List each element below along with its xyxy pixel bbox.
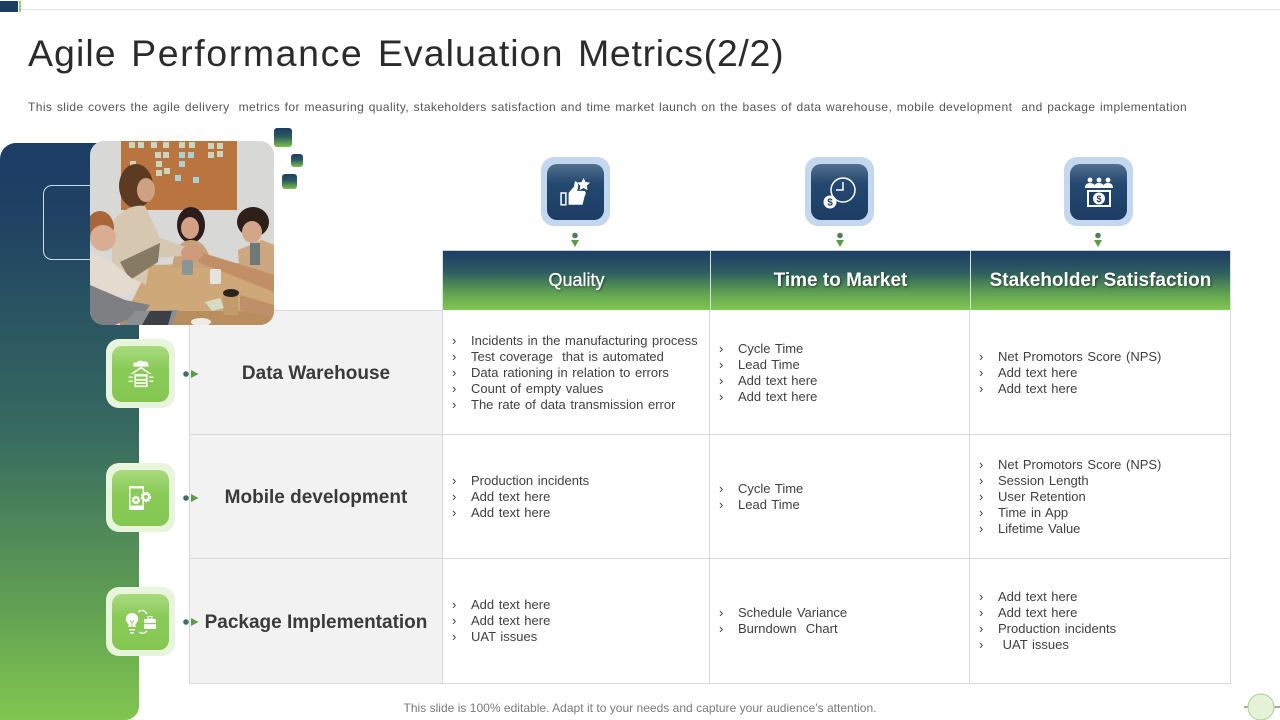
footer note: This slide is 100% editable. Adapt it to your needs and capture your audience's attention. (403, 701, 877, 715)
text: package stakeholder satisfaction: UAT issues (1003, 637, 1069, 652)
laptop (123, 310, 178, 325)
text: package quality: Add text here (471, 597, 550, 612)
text: package stakeholder satisfaction (980, 589, 1116, 652)
table body cells (443, 310, 1231, 684)
page marker circle (1244, 694, 1280, 720)
icon: time to market clock (805, 157, 874, 226)
arrow: time to market (836, 232, 844, 247)
icon: stakeholder satisfaction: $ (1096, 194, 1102, 204)
table (120, 262, 274, 325)
text: package time to market (720, 605, 847, 636)
column header Stakeholder Satisfaction: Stakeholder Satisfaction (990, 270, 1211, 291)
text: data warehouse stakeholder satisfaction (980, 349, 1161, 396)
arrow: stakeholder satisfaction (1094, 232, 1102, 247)
text: mobile stakeholder satisfaction: Net Promotors Score (NPS) (998, 457, 1161, 472)
arrow: mobile development (183, 494, 198, 502)
text: mobile stakeholder satisfaction: Session Length (998, 473, 1089, 488)
text: package stakeholder satisfaction: Add text here (998, 589, 1077, 604)
text: data warehouse time to market (720, 341, 817, 404)
column header Stakeholder Satisfaction (970, 250, 1231, 311)
text: data warehouse stakeholder satisfaction: Net Promotors Score (NPS) (998, 349, 1161, 364)
table: row header Mobile development (189, 434, 443, 559)
text: mobile stakeholder satisfaction: Lifetime Value (998, 521, 1080, 536)
text: data warehouse time to market: Add text here (738, 373, 817, 388)
text: mobile stakeholder satisfaction: User Retention (998, 489, 1086, 504)
center woman (177, 207, 205, 243)
icon: time to market clock: $ (827, 198, 833, 208)
column header Quality (442, 250, 710, 311)
icon: stakeholder satisfaction (1064, 157, 1133, 226)
text: mobile time to market: Cycle Time (738, 481, 803, 496)
table: row header Data Warehouse (189, 310, 443, 435)
arrow: package implementation (183, 618, 198, 626)
text: data warehouse time to market: Lead Time (738, 357, 800, 372)
outlined rounded frame (43, 185, 113, 260)
text: mobile stakeholder satisfaction: Time in App (998, 505, 1068, 520)
text: package quality (452, 597, 550, 644)
text: data warehouse quality: Data rationing in relation to errors (471, 365, 669, 380)
arrow: data warehouse (183, 370, 198, 378)
text: data warehouse quality: The rate of data transmission error (471, 397, 675, 412)
text: data warehouse quality: Test coverage that is automated (471, 349, 664, 364)
right man (237, 207, 269, 237)
text: package quality: UAT issues (471, 629, 537, 644)
subtitle: This slide covers the agile delivery metrics for measuring quality, stakeholders satisfaction and time market launch on the bases of data warehouse, mobile development and package implementation (28, 100, 1187, 114)
text: package stakeholder satisfaction: Production incidents (998, 621, 1116, 636)
text: data warehouse time to market: Add text here (738, 389, 817, 404)
column header Time to Market (710, 250, 970, 311)
standing woman (119, 164, 153, 208)
text: mobile time to market (720, 481, 803, 512)
text: package quality: Add text here (471, 613, 550, 628)
text: data warehouse stakeholder satisfaction: Add text here (998, 381, 1077, 396)
table: row header Package Implementation: Package Implementation (205, 612, 427, 632)
text: data warehouse stakeholder satisfaction: Add text here (998, 365, 1077, 380)
decorative squares (274, 128, 303, 189)
table: row header Data Warehouse: Data Warehouse (242, 363, 390, 384)
icon: package implementation (106, 587, 175, 656)
arrow: quality (571, 232, 579, 247)
text: mobile quality: Add text here (471, 505, 550, 520)
icon: quality thumbs up (541, 157, 610, 226)
icon: data warehouse (106, 339, 175, 408)
text: mobile quality (452, 473, 589, 520)
text: mobile time to market: Lead Time (738, 497, 800, 512)
text: mobile stakeholder satisfaction (980, 457, 1161, 536)
table: row header Package Implementation (189, 558, 443, 684)
photo: team meeting handshake (90, 141, 274, 325)
text: data warehouse quality: Count of empty values (471, 381, 603, 396)
text: data warehouse time to market: Cycle Time (738, 341, 803, 356)
text: package stakeholder satisfaction: Add text here (998, 605, 1077, 620)
left man (90, 211, 114, 240)
text: package time to market: Schedule Variance (738, 605, 847, 620)
text: package time to market: Burndown Chart (738, 621, 838, 636)
text: data warehouse quality: Incidents in the manufacturing process (471, 333, 698, 348)
text: data warehouse quality (452, 333, 698, 412)
icon: mobile development (106, 463, 175, 532)
title: Agile Performance Evaluation Metrics(2/2) (28, 32, 784, 74)
text: mobile quality: Add text here (471, 489, 550, 504)
cups (182, 260, 193, 275)
table: row header Mobile development: Mobile development (225, 487, 407, 508)
text: mobile quality: Production incidents (471, 473, 589, 488)
top accent bar (0, 1, 1280, 12)
column header Time to Market: Time to Market (774, 270, 907, 291)
left gradient side panel (0, 143, 139, 720)
column header Quality: Quality (548, 270, 605, 290)
